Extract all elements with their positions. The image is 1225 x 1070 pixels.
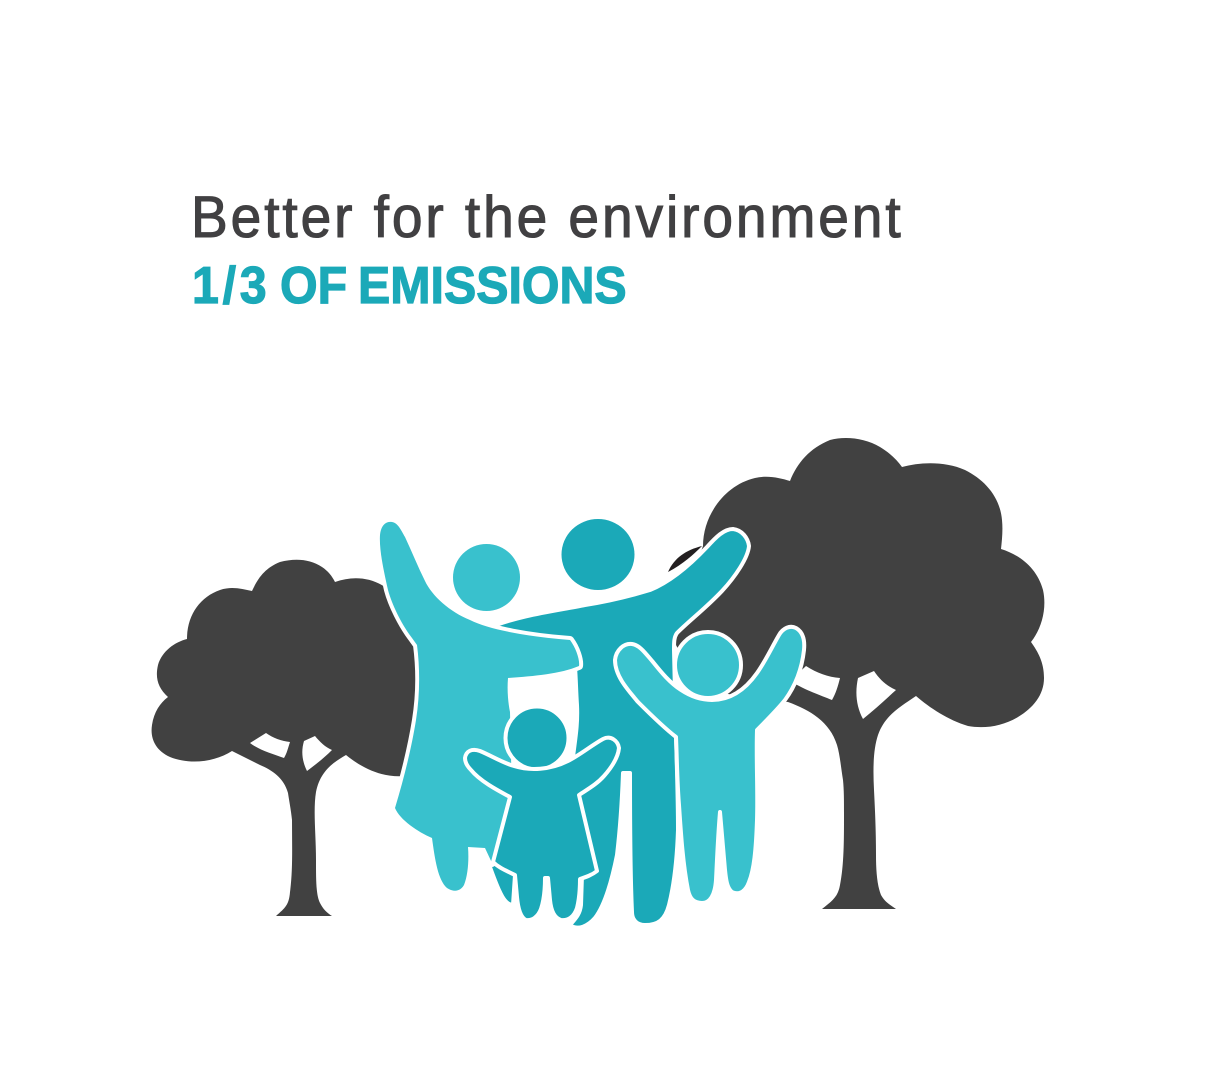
daughter body bbox=[465, 738, 619, 920]
left tree branch gap, left bbox=[250, 733, 290, 758]
daughter head bbox=[506, 706, 568, 770]
right tree branch gap, right bbox=[856, 671, 896, 719]
subheading: 1/3 of emissions: 1/3 bbox=[192, 256, 270, 314]
heading: Better for the environment: Better for the environment bbox=[191, 185, 901, 249]
figure: son bbox=[615, 627, 804, 903]
right tree branch gap, left bbox=[790, 666, 840, 700]
subheading: 1/3 of emissions: EMISSIONS bbox=[358, 256, 627, 314]
father body bbox=[480, 529, 749, 928]
father head bbox=[562, 519, 634, 590]
figure: daughter bbox=[465, 706, 619, 920]
son body bbox=[615, 627, 804, 903]
subheading: 1/3 of emissions: OF bbox=[280, 256, 347, 314]
figure: mother bbox=[380, 522, 579, 891]
son head bbox=[675, 632, 741, 698]
icon: left tree bbox=[152, 560, 430, 916]
mother head bbox=[453, 544, 520, 611]
left tree branch gap, right bbox=[302, 736, 332, 771]
icon: right tree bbox=[668, 438, 1044, 909]
figure: father bbox=[480, 519, 749, 928]
mother body bbox=[380, 522, 579, 891]
dark leaf behind raised arm bbox=[668, 546, 702, 572]
